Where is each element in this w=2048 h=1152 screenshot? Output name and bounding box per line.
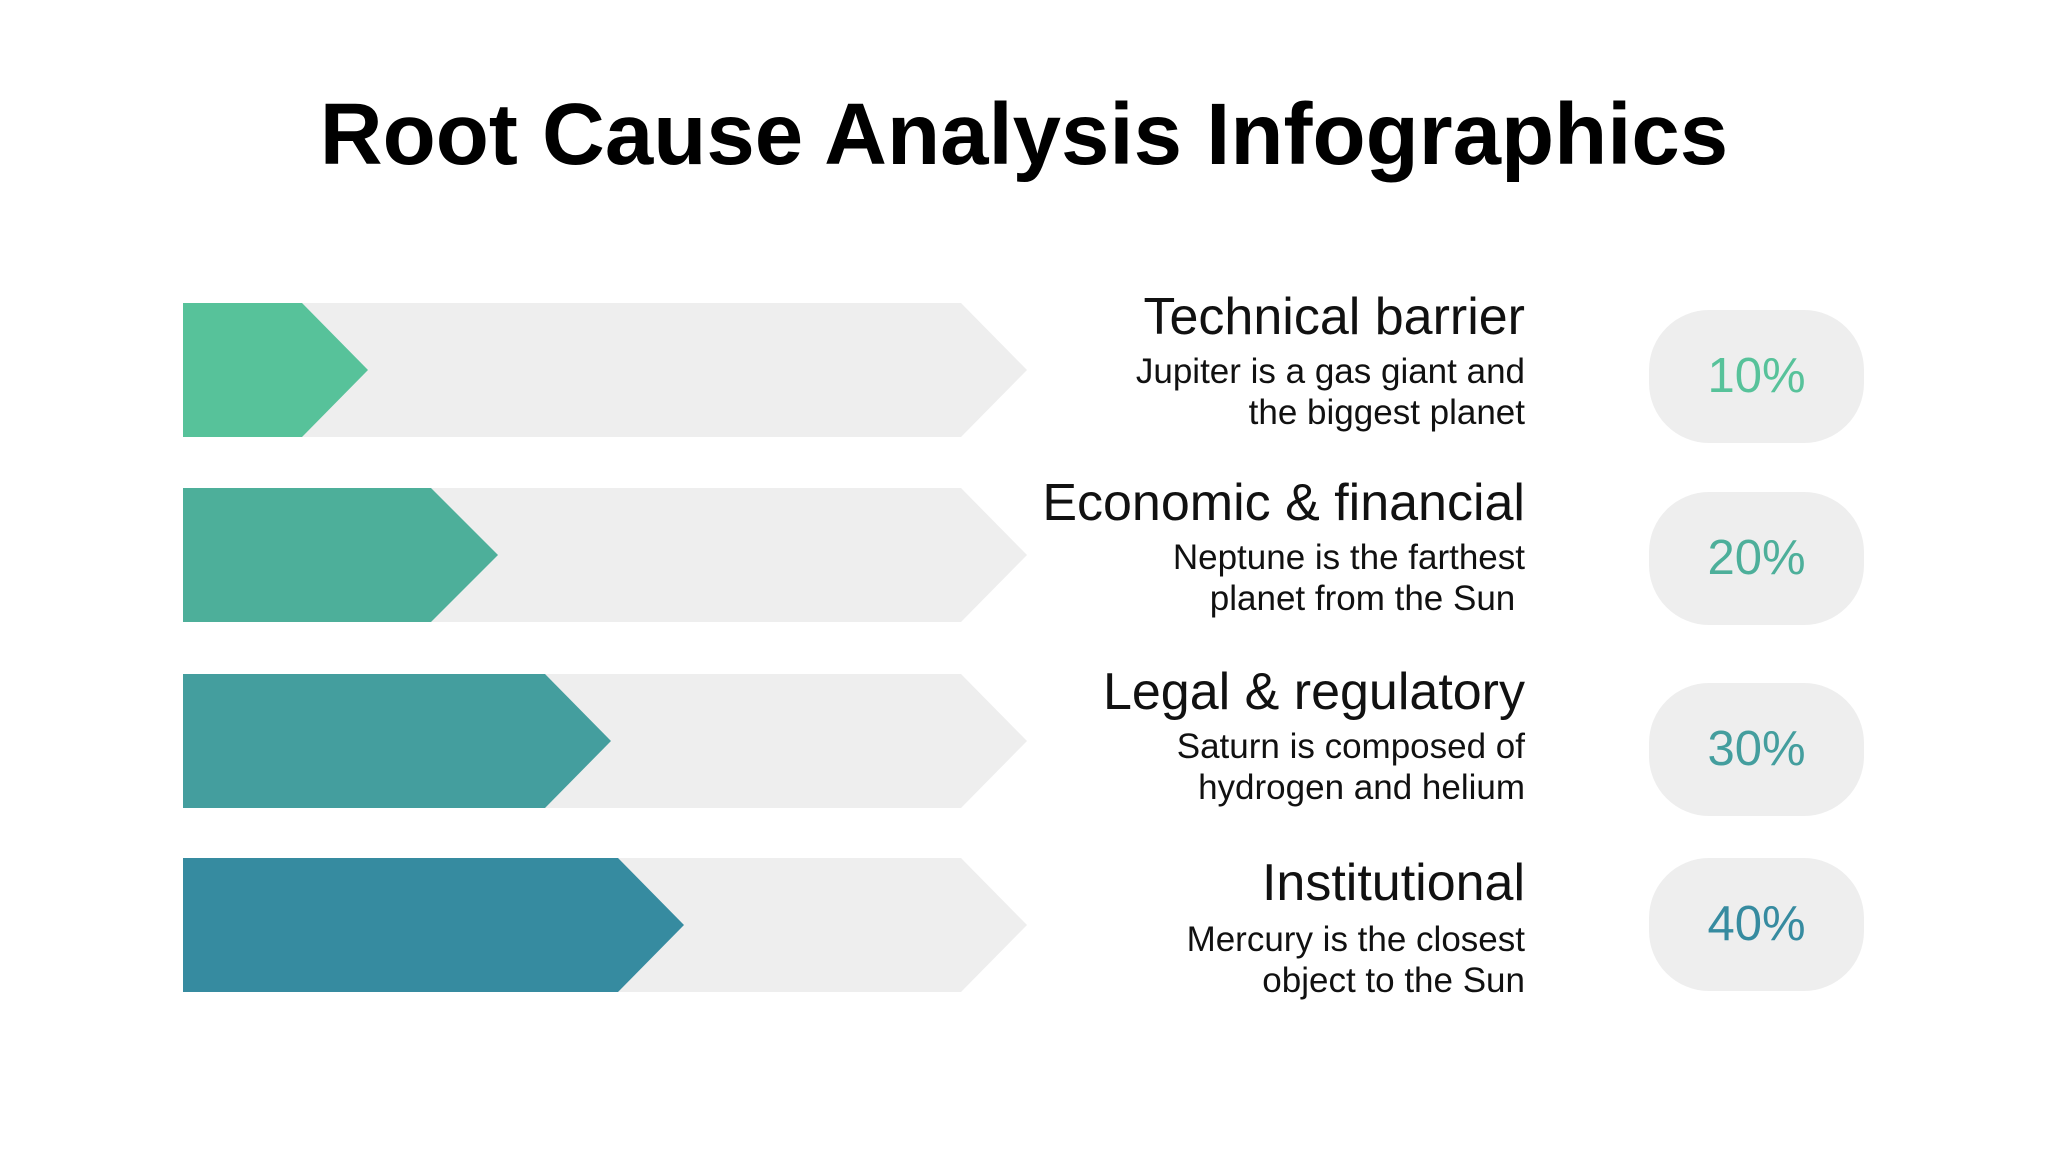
pill 40%: 40% xyxy=(1707,897,1806,951)
text: institutional: Institutional xyxy=(1262,854,1525,912)
text: economic: Economic & financial xyxy=(1042,474,1525,532)
bar 3 xyxy=(183,674,1027,808)
bar 2 xyxy=(183,488,1027,622)
pill 30% xyxy=(1649,683,1864,816)
text: technical barrier: Technical barrier xyxy=(1144,288,1525,346)
text: legal: hydrogen and helium xyxy=(1198,768,1525,807)
bar 4 xyxy=(183,858,1027,992)
text: institutional: Mercury is the closest xyxy=(1187,920,1525,959)
text: technical barrier xyxy=(1136,288,1525,432)
pill 10%: 10% xyxy=(1707,349,1806,403)
text: legal: Saturn is composed of xyxy=(1177,727,1525,766)
pill 40% xyxy=(1649,858,1864,991)
text: economic xyxy=(1042,474,1525,618)
text: economic: planet from the Sun xyxy=(1210,579,1515,618)
bar 1 xyxy=(183,303,1027,437)
text: legal: Legal & regulatory xyxy=(1103,663,1525,721)
pill 20%: 20% xyxy=(1707,531,1806,585)
text: economic: Neptune is the farthest xyxy=(1173,538,1525,577)
pill 30%: 30% xyxy=(1707,722,1806,776)
text: technical barrier: the biggest planet xyxy=(1249,393,1525,432)
text: legal xyxy=(1103,663,1526,807)
pill 10% xyxy=(1649,310,1864,443)
title: Root Cause Analysis Infographics xyxy=(320,86,1728,183)
text: institutional: object to the Sun xyxy=(1262,961,1525,1000)
text: institutional xyxy=(1187,854,1525,1000)
pill 20% xyxy=(1649,492,1864,625)
text: technical barrier: Jupiter is a gas giant and xyxy=(1136,352,1525,391)
